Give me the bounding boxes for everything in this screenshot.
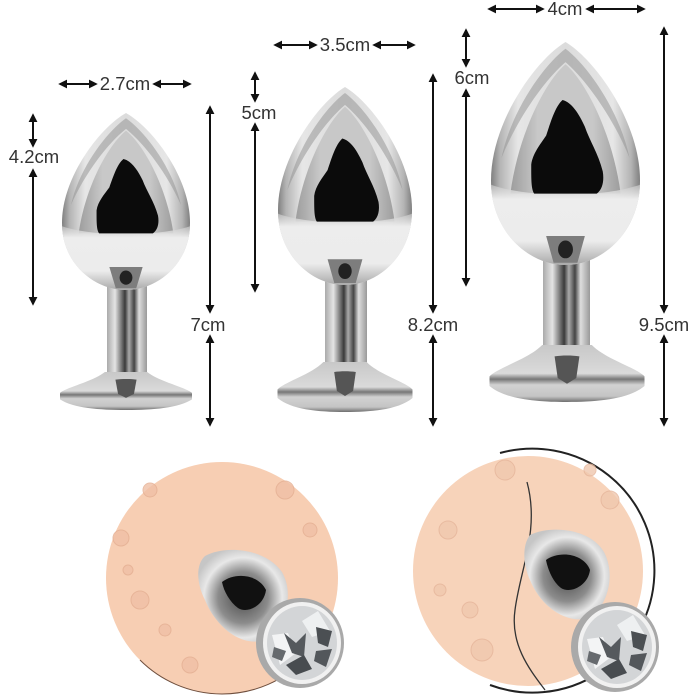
- product on right circle: [524, 530, 659, 692]
- product on left circle: [198, 550, 344, 688]
- usage circle: left: [106, 462, 344, 694]
- dimension: medium head height: 5cm: [242, 102, 276, 123]
- dimension: medium width: 3.5cm: [320, 34, 370, 55]
- dimension: small head height: 4.2cm: [9, 146, 59, 167]
- product: small: [60, 113, 192, 410]
- dimension: large head height: 6cm: [455, 67, 489, 88]
- dimension: small width: [60, 73, 190, 94]
- usage circle: right: [413, 449, 659, 693]
- product: medium: [278, 87, 412, 412]
- product: large: [490, 42, 644, 402]
- dimension: large total height: 9.5cm: [639, 314, 689, 335]
- dimension: medium width: [275, 34, 414, 55]
- dimension: small total height: 7cm: [191, 314, 225, 335]
- dimension: small width: 2.7cm: [100, 73, 150, 94]
- dimension: medium total height: 8.2cm: [408, 314, 458, 335]
